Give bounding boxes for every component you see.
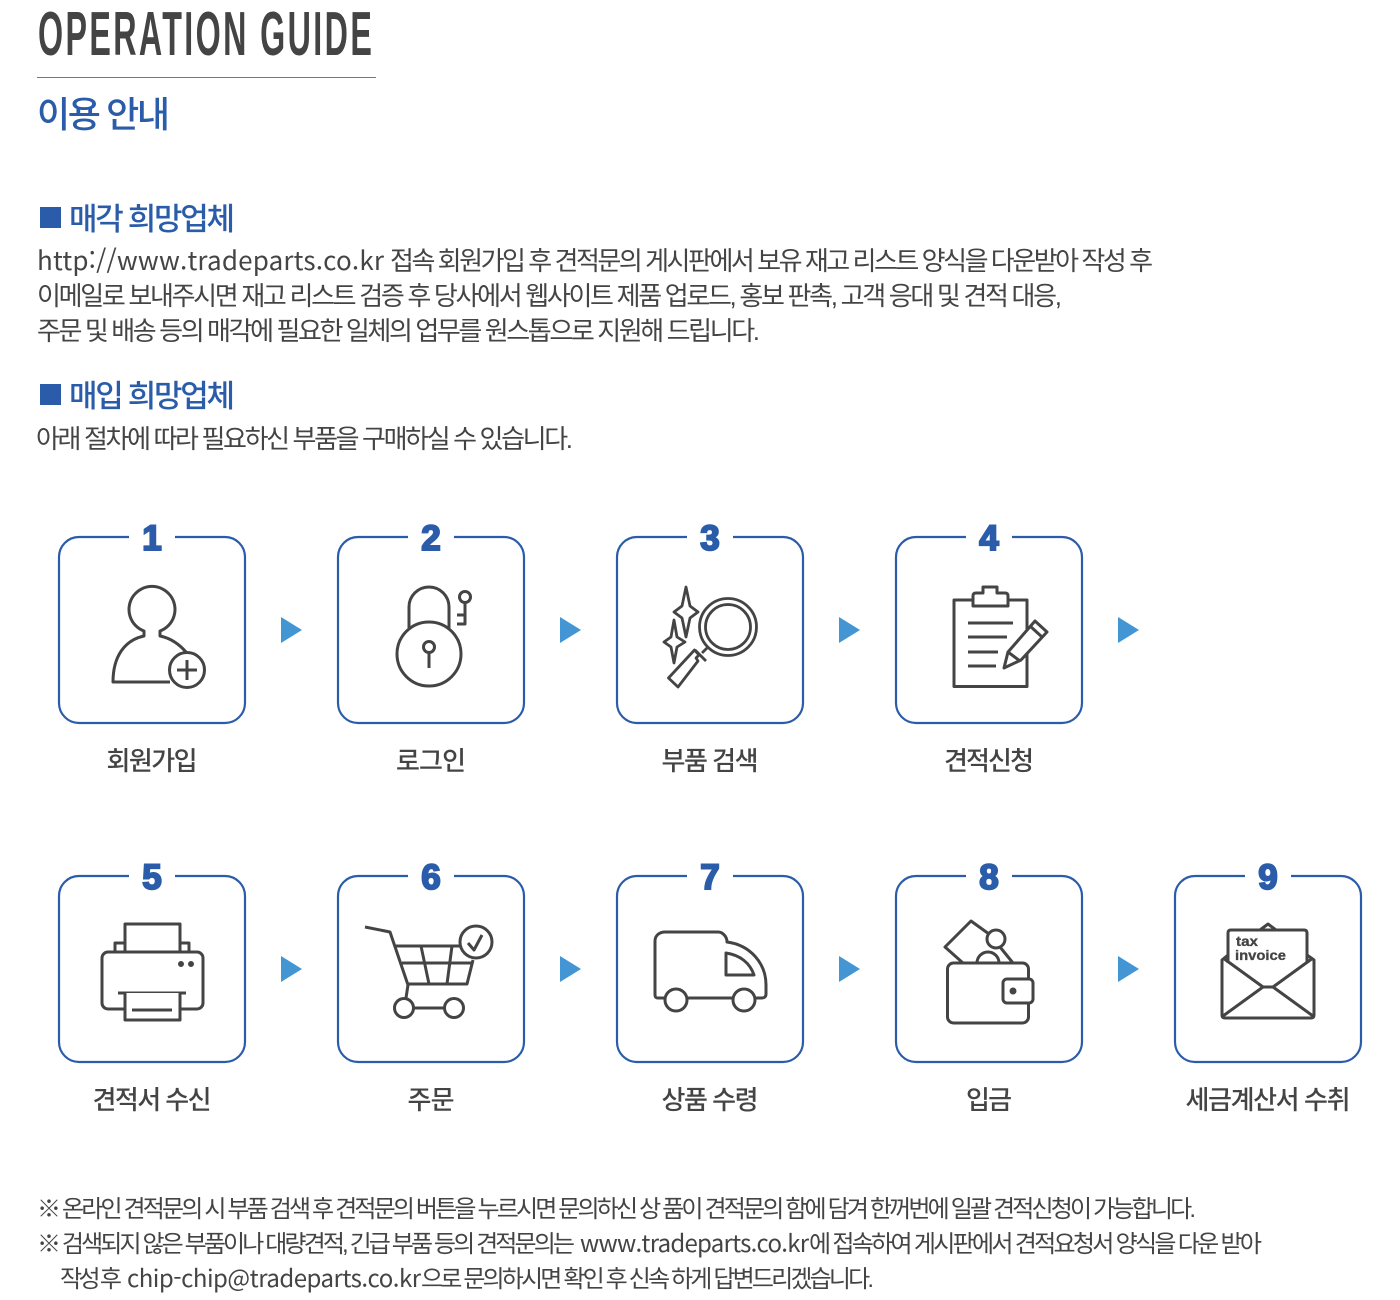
step 8: payment: 입금 xyxy=(966,1085,1012,1115)
step 4: request quote xyxy=(896,519,1082,776)
footnotes: 으로 문의하시면 확인 후 신속 하게 답변드리겠습니다. xyxy=(421,1266,874,1293)
icon: envelope with invoice xyxy=(1222,924,1314,1018)
arrow xyxy=(1118,956,1139,982)
arrow xyxy=(560,956,581,982)
step 1: sign up: 회원가입 xyxy=(106,746,198,776)
arrow xyxy=(839,617,860,643)
footnotes: ※ 온라인 견적문의 시 부품 검색 후 견적문의 버튼을 누르시면 문의하신 상 품이 견적문의 함에 담겨 한꺼번에 일괄 견적신청이 가능합니다. xyxy=(37,1196,1196,1223)
step 5: receive quote xyxy=(59,858,245,1115)
icon: magnifier and sparkles xyxy=(664,587,756,687)
footnotes: 작성 후 xyxy=(60,1266,122,1293)
step 2: login: 로그인 xyxy=(396,746,466,776)
arrow xyxy=(1118,617,1139,643)
icon: envelope with invoice: tax xyxy=(1236,933,1258,949)
step 8: payment: 8 xyxy=(979,858,999,897)
step 4: request quote: 4 xyxy=(979,519,999,558)
step 1: sign up xyxy=(59,519,245,776)
step 9: tax invoice: 9 xyxy=(1258,858,1278,897)
step 4: request quote: 견적신청 xyxy=(944,746,1034,776)
text block: buyers: 아래 절차에 따라 필요하신 부품을 구매하실 수 있습니다. xyxy=(36,424,573,454)
step 2: login: 2 xyxy=(421,519,441,558)
section heading: buyers: 매입 희망업체 xyxy=(69,379,235,414)
text block: sellers: 접속 회원가입 후 견적문의 게시판에서 보유 재고 리스트 양식을 다운받아 작성 후 xyxy=(390,246,1153,276)
step 7: receive goods: 상품 수령 xyxy=(662,1085,758,1115)
step 5: receive quote: 견적서 수신 xyxy=(92,1085,212,1115)
text block: sellers: http://www.tradeparts.co.kr xyxy=(37,241,385,278)
arrow xyxy=(839,956,860,982)
step 2: login xyxy=(338,519,524,776)
text block: sellers: 이메일로 보내주시면 재고 리스트 검증 후 당사에서 웹사이트 제품 업로드, 홍보 판촉, 고객 응대 및 견적 대응, xyxy=(37,281,1062,311)
icon: wallet xyxy=(945,921,1033,1023)
step 9: tax invoice xyxy=(1175,858,1361,1115)
step 8: payment xyxy=(896,858,1082,1115)
footnotes: chip-chip@tradeparts.co.kr xyxy=(127,1259,422,1294)
icon: clipboard and pencil xyxy=(954,587,1047,686)
section heading: sellers: 매각 희망업체 xyxy=(69,202,235,237)
icon: envelope with invoice: invoice xyxy=(1235,947,1286,963)
footnotes: www.tradeparts.co.kr xyxy=(580,1224,810,1259)
icon: delivery truck xyxy=(655,932,766,1011)
step 3: search parts: 부품 검색 xyxy=(662,746,758,776)
step 7: receive goods xyxy=(617,858,803,1115)
step 5: receive quote: 5 xyxy=(142,858,162,897)
icon: shopping cart xyxy=(365,926,492,1018)
arrow xyxy=(560,617,581,643)
step 3: search parts: 3 xyxy=(700,519,720,558)
step 6: order: 주문 xyxy=(408,1085,454,1115)
subtitle: 이용 안내 xyxy=(37,94,170,135)
step 1: sign up: 1 xyxy=(142,519,162,558)
step 7: receive goods: 7 xyxy=(700,858,720,897)
text block: sellers xyxy=(37,241,1153,346)
icon: user add xyxy=(113,586,204,688)
footnotes: 에 접속하여 게시판에서 견적요청서 양식을 다운 받아 xyxy=(809,1231,1262,1258)
footnotes xyxy=(37,1196,1262,1294)
text block: sellers: 주문 및 배송 등의 매각에 필요한 일체의 업무를 원스톱으로 지원해 드립니다. xyxy=(37,316,760,346)
step 6: order: 6 xyxy=(421,858,441,897)
title: OPERATION GUIDE xyxy=(38,0,372,69)
step 3: search parts xyxy=(617,519,803,776)
arrow xyxy=(281,617,302,643)
icon: padlock and key xyxy=(397,587,470,686)
footnotes: ※ 검색되지 않은 부품이나 대량견적, 긴급 부품 등의 견적문의는 xyxy=(37,1231,575,1258)
arrow xyxy=(281,956,302,982)
step 9: tax invoice: 세금계산서 수취 xyxy=(1186,1085,1350,1115)
icon: printer xyxy=(102,924,203,1020)
step 6: order xyxy=(338,858,524,1115)
